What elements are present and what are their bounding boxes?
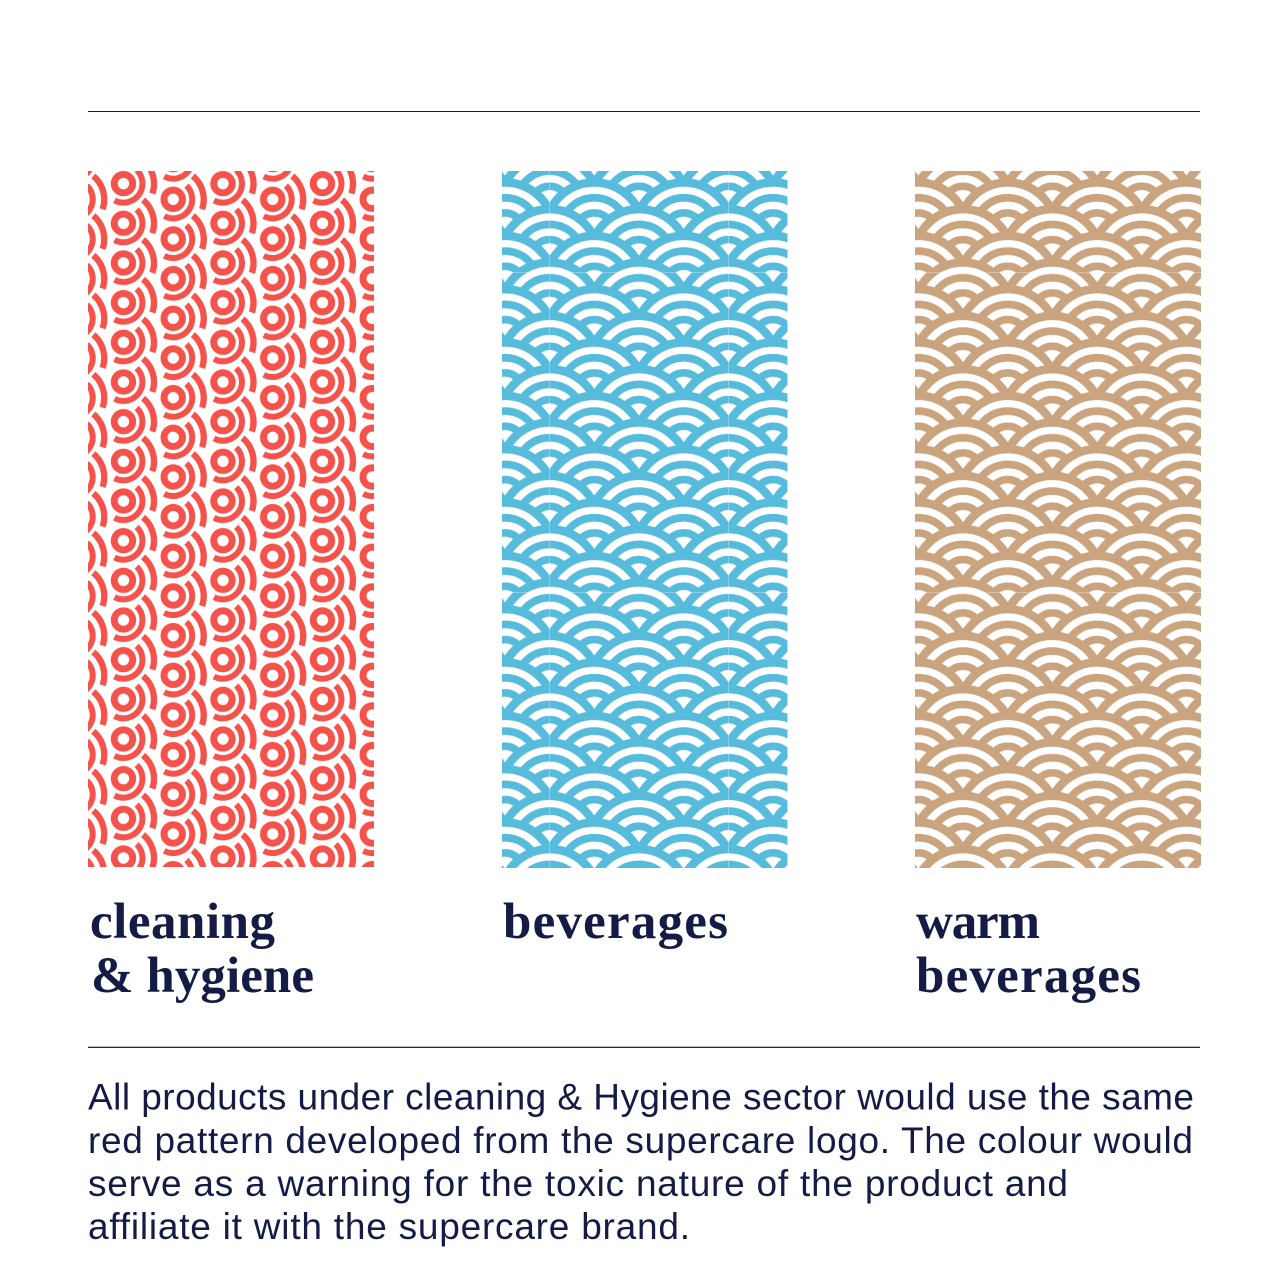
- body text: description of the red pattern: affiliate it with the supercare brand.: [88, 1206, 690, 1247]
- panel: red cleaning and hygiene pattern: [88, 171, 374, 867]
- panel: tan warm beverages pattern: [915, 171, 1201, 868]
- heading: warm beverages: [916, 894, 1141, 1004]
- body text: description of the red pattern: serve as a warning for the toxic nature of the product and: [88, 1163, 1068, 1204]
- body text: description of the red pattern: red pattern developed from the supercare logo. The colour would: [88, 1120, 1193, 1161]
- heading: warm beverages: beverages: [916, 948, 1141, 1004]
- body text: description of the red pattern: All products under cleaning & Hygiene sector would use the same: [88, 1076, 1194, 1117]
- heading: cleaning and hygiene: & hygiene: [91, 948, 314, 1004]
- heading: beverages: beverages: [503, 894, 728, 950]
- heading: warm beverages: warm: [916, 894, 1040, 950]
- panel: blue beverages pattern: [502, 171, 788, 868]
- heading: cleaning and hygiene: cleaning: [90, 894, 275, 950]
- body text: description of the red pattern: [88, 1076, 1194, 1247]
- heading: cleaning and hygiene: [90, 894, 314, 1004]
